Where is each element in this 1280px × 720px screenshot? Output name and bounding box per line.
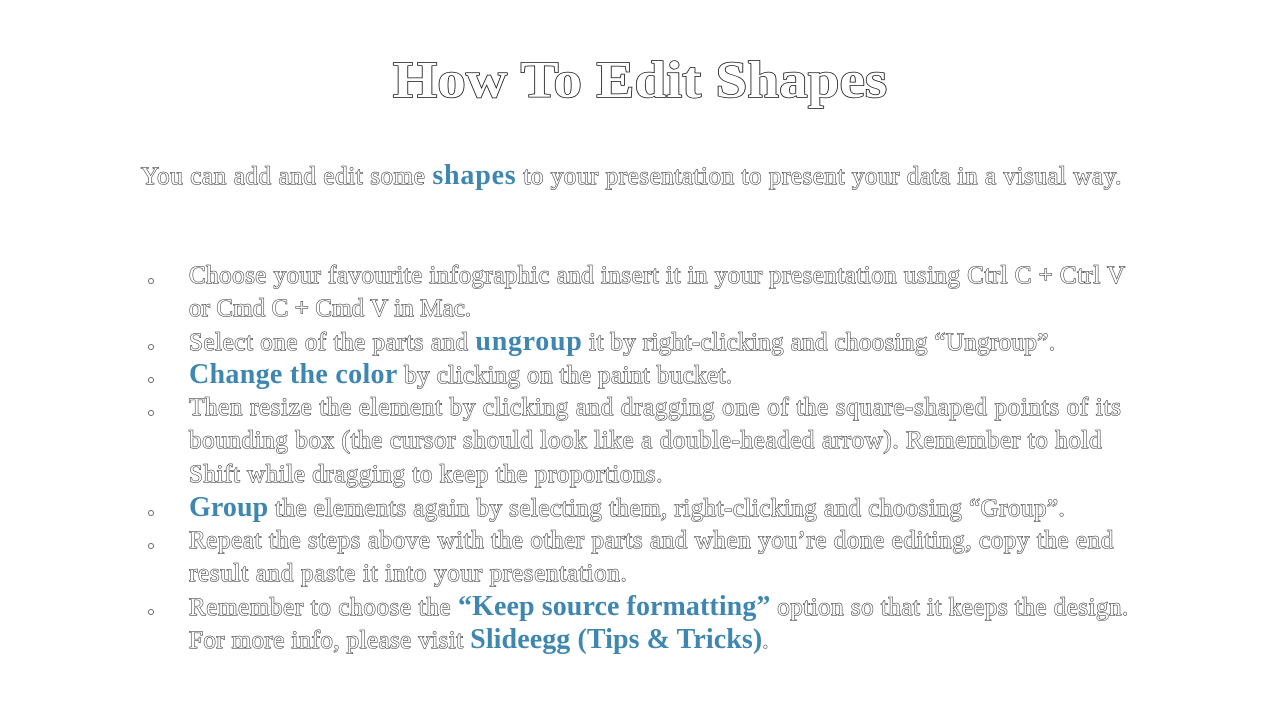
bullet list: Then resize the element by clicking and dragging one of the square-shaped points of its <box>189 394 1122 421</box>
bullet list: Change the color by clicking on the paint bucket. <box>189 359 733 390</box>
bullet list: Group the elements again by selecting them, right-clicking and choosing “Group”. <box>189 492 1065 523</box>
bullet list: result and paste it into your presentation. <box>189 560 628 587</box>
bullet list: Shift while dragging to keep the proportions. <box>189 461 663 488</box>
bullet list: bounding box (the cursor should look like a double-headed arrow). Remember to hold <box>189 427 1102 454</box>
bullet list: Select one of the parts and ungroup it by right-clicking and choosing “Ungroup”. <box>189 326 1055 357</box>
bullet list: or Cmd C + Cmd V in Mac. <box>189 295 471 322</box>
bullet list: Remember to choose the “Keep source formatting” option so that it keeps the design. <box>189 591 1129 622</box>
bullet list: Repeat the steps above with the other parts and when you’re done editing, copy the end <box>189 527 1114 554</box>
bullet list: For more info, please visit Slideegg (Tips & Tricks). <box>189 624 769 655</box>
intro text: You can add and edit some shapes to your presentation to present your data in a visual way. <box>141 160 1122 191</box>
bullet list: Choose your favourite infographic and insert it in your presentation using Ctrl C + Ctrl V <box>189 262 1126 289</box>
title: How To Edit Shapes <box>393 52 887 109</box>
bullet list <box>148 262 1129 655</box>
